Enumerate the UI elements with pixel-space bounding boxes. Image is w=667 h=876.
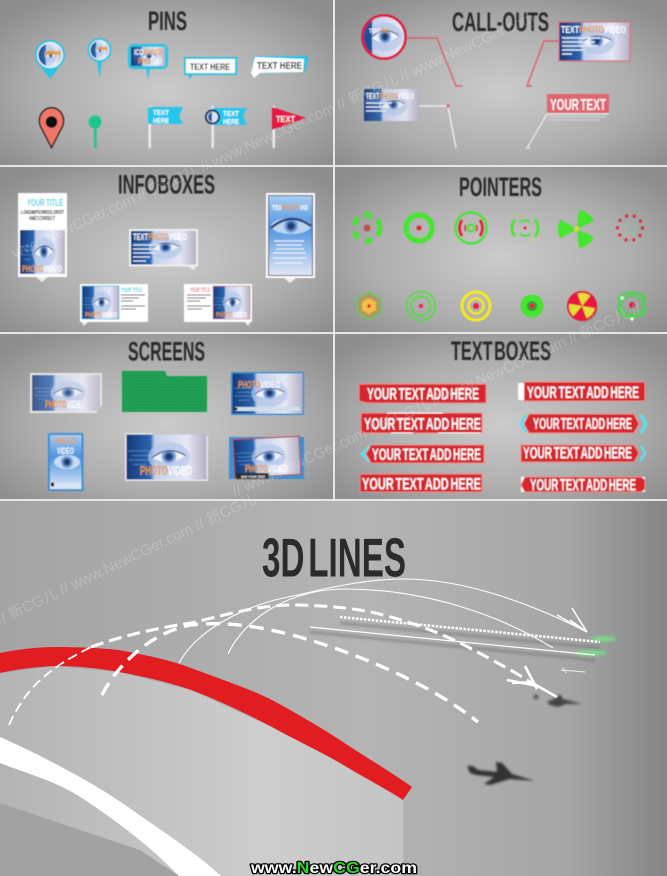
infobox: text left, photo right: PHOTOVIDEO (216, 310, 247, 319)
screen: portrait blue frame: VIDEO (57, 446, 74, 456)
3d lines: arcs (9, 579, 600, 725)
pointer: green disc (520, 294, 544, 318)
callout: rectangular photo with red leader (527, 22, 630, 86)
scene background (0, 501, 667, 876)
text box 1 (359, 384, 486, 404)
callout: your text label with white leader (527, 94, 609, 148)
callout: your text label with white leader: YOUR TEXT (550, 97, 606, 114)
flag: red triangle flag (272, 106, 306, 148)
pointer: solid ring (406, 215, 432, 241)
icon: green ball pin (88, 116, 102, 148)
flag: red triangle flag: TEXT (276, 115, 295, 124)
pointer: atom orbit (615, 289, 649, 321)
screen: portrait blue frame: PHOTO (55, 436, 76, 446)
infobox: tall portrait photo: TEXPHOTOVID (272, 203, 308, 212)
infobox: photo left, text right: YOUR TITLE (121, 288, 142, 294)
screen: portrait blue frame (48, 433, 84, 491)
pointer: broken arcs (512, 215, 538, 241)
speech bubble pin: TEXT HERE (190, 62, 230, 73)
thick dashed arc to arrow (91, 605, 527, 680)
infobox: landscape photo: TEXTPHOTOVIDEO (133, 232, 187, 243)
heading: infoboxes: INFOBOXES (118, 170, 215, 200)
infobox: tall portrait photo (266, 193, 315, 283)
icon: map marker (40, 108, 63, 148)
plane shadows (467, 694, 582, 785)
flag: cyan photo flag: HERE (223, 119, 239, 126)
watermarks: www.NewCGer.com // 新CG儿 // www.NewCGer.com // 新CG儿 // www.NewCGer.com (9, 9, 537, 262)
pointer: thin double ring (406, 292, 436, 320)
text box 2: YOUR TEXT ADD HERE (364, 415, 481, 434)
heading: pointers: POINTERS (459, 172, 542, 202)
white band (0, 737, 221, 876)
light wedge surface (0, 666, 403, 876)
pointer: red dot ring (618, 216, 642, 240)
straight thin line (310, 627, 595, 655)
pointer: ring with red arcs (456, 212, 486, 244)
callout: circular photo with red leader (350, 15, 462, 86)
pointer: red radiation disc (567, 291, 598, 322)
panel: text boxes (359, 336, 646, 495)
heading: pins: PINS (148, 6, 187, 36)
heading: 3d lines: 3D LINES (262, 526, 406, 588)
thin solid arc two (228, 589, 553, 654)
heading: screens: SCREENS (128, 336, 205, 366)
panel: pointers (354, 172, 649, 322)
watermarks (0, 9, 644, 629)
angled speech bubble pin: TEXT HERE (257, 61, 302, 72)
arrowheads (507, 608, 587, 697)
small plane (561, 668, 585, 673)
watermarks: // 新CG儿 // www.NewCGer.com // 新CG儿 (0, 491, 258, 629)
speech bubble pin (185, 58, 236, 79)
watermarks: // www.NewCGer.com // 新CG儿 // www.NewCGer.com // 新CG儿 // (230, 300, 644, 501)
darker lower corner (0, 803, 179, 876)
text box 3 (362, 445, 484, 464)
screen: white corner photo: PHOTOVIDEO (140, 463, 192, 478)
infobox: photo left, text right (80, 284, 148, 326)
screen: tilted photo on blue (229, 436, 304, 479)
flag: cyan text flag (148, 106, 183, 148)
dotted straight line (340, 617, 600, 642)
icon: round photo pin large (35, 40, 65, 79)
panel: infoboxes (18, 170, 315, 326)
flag: cyan text flag: HERE (153, 118, 169, 125)
infobox: portrait with title: PHOTOVIDEO (22, 264, 62, 275)
line shadows (310, 623, 600, 660)
icon: rectangular photo pin: ICOPHOTO (134, 48, 162, 57)
infobox: portrait with title (18, 193, 67, 282)
infobox: photo left, text right: PHOTOVIDEO (85, 310, 117, 319)
screen: tilted photo on blue: ADD YOUR TEXT (241, 474, 265, 479)
screen: tilted photo on blue: PHOTOVIDEO (245, 463, 288, 475)
pointer: dashed ring (354, 215, 380, 241)
callout: circular photo with red leader: TEXTPHO (369, 29, 390, 35)
pointer: radiation fan (558, 210, 594, 248)
angled speech bubble pin (251, 56, 309, 78)
callout: faded photo with white leader (364, 89, 456, 148)
infobox: landscape photo (129, 229, 198, 270)
green glows (575, 636, 616, 656)
callout: rectangular photo with red leader: TEXTPHOTOVIDEO (561, 24, 626, 36)
callout: faded photo with white leader: TEXTPHOTOVIDEO (366, 92, 414, 101)
text box 3: YOUR TEXT ADD HERE (372, 445, 481, 464)
infobox: portrait with title: YOUR TITLE (27, 198, 63, 209)
icon: rectangular photo pin (128, 44, 168, 80)
red band (0, 647, 412, 800)
thick dashed arc (102, 624, 478, 722)
infobox: portrait with title: LOREMIPSUMDOLORSIT (21, 210, 65, 216)
screen: torn photo frame: PHOTOVIDE (45, 399, 81, 411)
icon: round photo pin small (88, 38, 112, 79)
infobox: text left, photo right (184, 284, 252, 326)
panel: pins (35, 6, 309, 148)
text box 1: YOUR TEXT ADD HERE (367, 384, 479, 404)
panel: call-outs (350, 7, 630, 148)
pointer: hexagon target (357, 292, 381, 320)
pointer: yellow target (462, 292, 490, 320)
heading: call-outs: CALL-OUTS (452, 7, 549, 37)
text box 4: YOUR TEXT ADD HERE (362, 475, 481, 494)
infobox: portrait with title: AMET,CONSECT (28, 216, 56, 222)
flag: cyan photo flag (205, 106, 247, 148)
infobox: text left, photo right: YOUR TITLE (190, 288, 210, 294)
text box 2 (361, 413, 482, 434)
screen: torn photo frame (30, 373, 102, 413)
panel: screens (30, 336, 304, 491)
heading: text boxes: TEXT BOXES (451, 336, 551, 366)
icon: rectangular photo pin: PHOTOU (138, 57, 162, 66)
thin solid arc one (179, 579, 587, 663)
screen: green folder (122, 371, 207, 412)
thin dashed arc (9, 647, 91, 725)
flag: cyan text flag: TEXT (153, 110, 170, 117)
flag: cyan photo flag: TEXT (223, 111, 240, 118)
screen: blue framed photo with progress bar (231, 372, 304, 415)
screen: white corner photo (125, 433, 208, 481)
panel: 3d lines (0, 501, 667, 876)
screen: blue framed photo with progress bar: PHOTOVIDEO (238, 379, 280, 391)
text box 4 (360, 474, 482, 494)
